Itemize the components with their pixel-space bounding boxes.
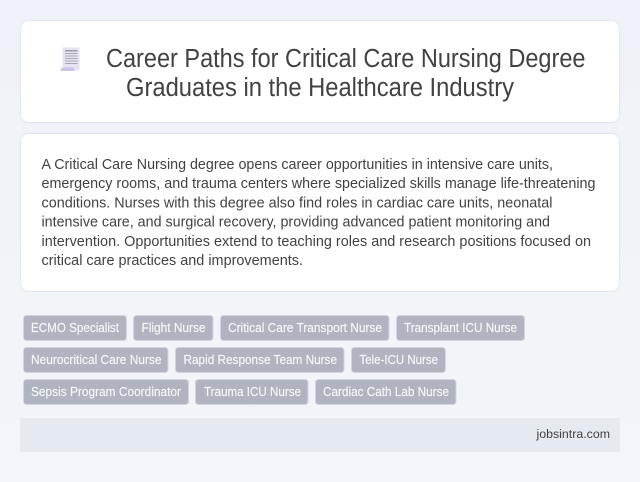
tag: ECMO Specialist [24, 316, 126, 340]
tag: Sepsis Program Coordinator: Sepsis Program Coordinator [31, 385, 181, 399]
footer bar [20, 418, 620, 452]
title: Career Paths for Critical Care Nursing Degree [106, 45, 586, 73]
footer source: jobsintra.com [535, 427, 610, 441]
tag list [24, 316, 524, 404]
tag: Transplant ICU Nurse [396, 316, 524, 340]
tag: Neurocritical Care Nurse: Neurocritical Care Nurse [31, 353, 162, 367]
description text: emergency rooms, and trauma centers where specialized skills manage life-threatening [42, 176, 596, 192]
tag: Sepsis Program Coordinator [24, 380, 188, 404]
tag: Neurocritical Care Nurse [24, 348, 168, 372]
tag: Transplant ICU Nurse: Transplant ICU Nurse [404, 321, 517, 335]
panel: description [20, 134, 620, 292]
tag: Cardiac Cath Lab Nurse [316, 380, 456, 404]
title: Graduates in the Healthcare Industry [126, 74, 514, 102]
tag: Rapid Response Team Nurse: Rapid Response Team Nurse [184, 353, 337, 367]
icon: document scroll [60, 48, 80, 71]
title [106, 45, 586, 102]
description text: conditions. Nurses with this degree also find roles in cardiac care units, neonatal [42, 196, 552, 212]
tag: Trauma ICU Nurse [196, 380, 308, 404]
description text: critical care practices and improvements. [42, 253, 303, 269]
description text [42, 157, 596, 269]
tag: Trauma ICU Nurse: Trauma ICU Nurse [204, 385, 301, 399]
tag: Flight Nurse [134, 316, 213, 340]
tag: Critical Care Transport Nurse: Critical Care Transport Nurse [228, 321, 382, 335]
tag: ECMO Specialist: ECMO Specialist [31, 321, 119, 335]
tag: Cardiac Cath Lab Nurse: Cardiac Cath Lab Nurse [323, 385, 449, 399]
tag: Tele-ICU Nurse: Tele-ICU Nurse [360, 353, 438, 367]
tag: Flight Nurse: Flight Nurse [142, 321, 206, 335]
description text: intensive care, and surgical recovery, providing advanced patient monitoring and [42, 215, 550, 231]
description text: A Critical Care Nursing degree opens career opportunities in intensive care units, [42, 157, 553, 173]
description text: intervention. Opportunities extend to teaching roles and research positions focused on [42, 234, 591, 250]
tag: Rapid Response Team Nurse [176, 348, 344, 372]
tag: Critical Care Transport Nurse [220, 316, 389, 340]
tag: Tele-ICU Nurse [352, 348, 446, 372]
panel: title card [20, 20, 620, 122]
